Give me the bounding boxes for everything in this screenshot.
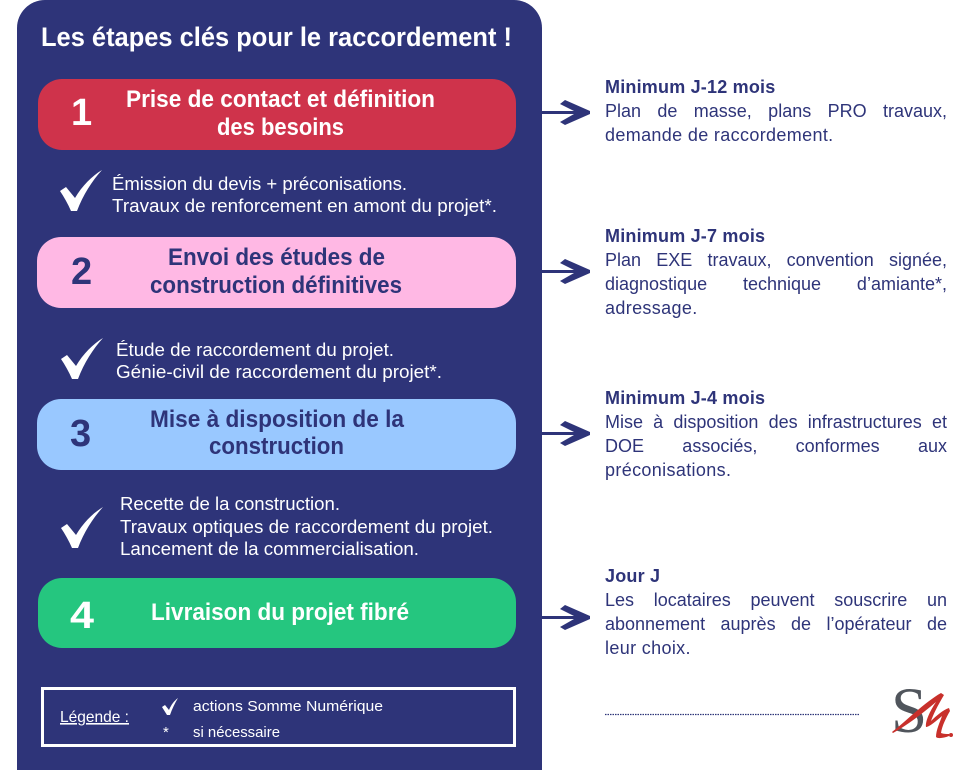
step 1 banner — [38, 79, 516, 150]
step 2 actions: Génie-civil de raccordement du projet*. — [116, 362, 442, 382]
step 1 actions — [60, 170, 497, 216]
step 2 banner — [37, 237, 516, 308]
timing 1: Plan de masse, plans PRO travaux, — [605, 101, 947, 121]
timing 4 — [605, 566, 947, 658]
timing 2: Minimum J-7 mois — [605, 226, 765, 246]
step 1 actions: Émission du devis + préconisations. — [112, 174, 407, 194]
step 2 actions — [61, 338, 442, 382]
timing 4: leur choix. — [605, 638, 691, 658]
legend: Légende : — [60, 709, 129, 726]
timing 2: diagnostique technique d’amiante*, — [605, 274, 947, 294]
title: Les étapes clés pour le raccordement ! — [41, 22, 512, 52]
legend: si nécessaire — [193, 724, 280, 741]
step 3 actions: Travaux optiques de raccordement du projet. — [120, 517, 493, 537]
step 4 banner — [38, 578, 516, 648]
timing 2 — [605, 226, 947, 318]
step 3 banner: construction — [209, 433, 344, 460]
timing 4: Les locataires peuvent souscrire un — [605, 590, 947, 610]
step 4 banner: 4 — [70, 595, 94, 637]
legend: * — [163, 724, 169, 741]
timing 1: demande de raccordement. — [605, 125, 834, 145]
timing 3: Mise à disposition des infrastructures et — [605, 412, 947, 432]
panel: steps background — [17, 0, 542, 770]
logo — [891, 675, 953, 747]
step 2 banner: 2 — [71, 251, 92, 293]
step 1 banner: des besoins — [217, 114, 344, 141]
timing 3: Minimum J-4 mois — [605, 388, 765, 408]
arrow 2 — [542, 259, 590, 284]
step 2 banner: construction définitives — [150, 272, 402, 299]
arrow 4 — [542, 605, 590, 630]
arrow 1 — [542, 100, 590, 125]
legend: actions Somme Numérique — [193, 698, 383, 715]
step 1 banner: Prise de contact et définition — [126, 86, 435, 113]
footer dotted rule — [605, 714, 859, 716]
timing 3: DOE associés, conformes aux — [605, 436, 947, 456]
timing 1 — [605, 77, 947, 145]
timing 4: abonnement auprès de l’opérateur de — [605, 614, 947, 634]
step 1 banner: 1 — [71, 92, 92, 134]
timing 4: Jour J — [605, 566, 660, 586]
step 3 banner: Mise à disposition de la — [150, 406, 405, 433]
step 4 banner: Livraison du projet fibré — [151, 599, 409, 626]
timing 1: Minimum J-12 mois — [605, 77, 775, 97]
step 2 banner: Envoi des études de — [168, 244, 385, 271]
arrow 3 — [542, 421, 590, 446]
timing 2: adressage. — [605, 298, 698, 318]
step 1 actions: Travaux de renforcement en amont du projet*. — [112, 196, 497, 216]
timing 3: préconisations. — [605, 460, 731, 480]
legend — [42, 688, 514, 746]
timing 2: Plan EXE travaux, convention signée, — [605, 250, 947, 270]
timing 3 — [605, 388, 947, 480]
step 3 actions: Recette de la construction. — [120, 494, 340, 514]
step 3 banner: 3 — [70, 413, 91, 455]
step 3 actions — [61, 494, 493, 559]
step 3 actions: Lancement de la commercialisation. — [120, 539, 419, 559]
step 3 banner — [37, 399, 516, 470]
logo: S — [891, 675, 927, 747]
step 2 actions: Étude de raccordement du projet. — [116, 340, 394, 360]
